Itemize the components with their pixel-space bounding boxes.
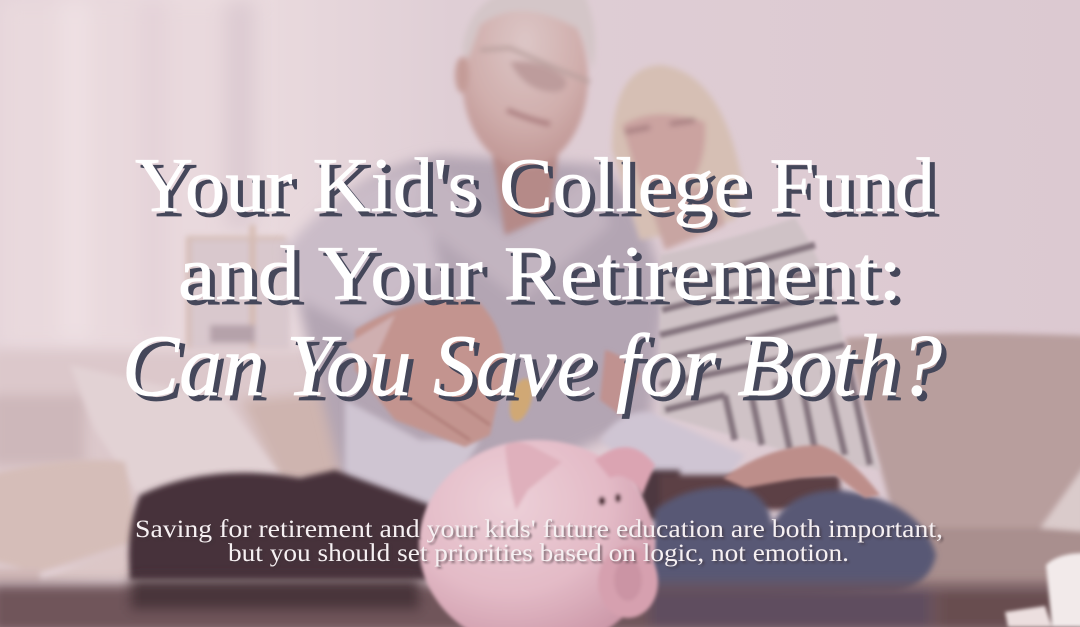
right sofa (845, 333, 1080, 590)
left seat cushion (0, 460, 138, 582)
man's shirt (285, 155, 665, 510)
table (0, 578, 1080, 627)
subtitle: but you should set priorities based on logic, not emotion. (230, 542, 851, 569)
striped sweater (660, 218, 880, 470)
subtitle (135, 516, 945, 569)
woman's hand on knee (723, 445, 880, 498)
woman (612, 65, 742, 250)
right pillow (1040, 465, 1080, 532)
piggy bank (419, 440, 658, 627)
subtitle: but you should set priorities based on logic, not emotion. (228, 540, 849, 567)
curtain at left (0, 0, 255, 350)
subtitle: Saving for retirement and your kids' future education are both important, (135, 516, 943, 543)
title line 3 italic: Can You Save for Both? (127, 323, 947, 420)
title (122, 142, 947, 420)
shelf (186, 225, 290, 350)
title line 3 italic: Can You Save for Both? (122, 318, 942, 415)
title line 2: and Your Retirement: (183, 235, 907, 321)
dark trousers (129, 470, 430, 580)
jeans (650, 487, 936, 605)
title line 1: Your Kid's College Fund (135, 142, 935, 228)
man's hand dropping coin (345, 300, 640, 447)
left pillow (70, 365, 280, 505)
title line 2: and Your Retirement: (178, 230, 902, 316)
man's head (455, 0, 595, 235)
dark area between legs (640, 470, 840, 520)
cup (1005, 553, 1080, 627)
man's lower shirt and sleeve (345, 400, 745, 512)
title line 1: Your Kid's College Fund (140, 147, 940, 233)
subtitle: Saving for retirement and your kids' future education are both important, (137, 518, 945, 545)
left sofa (0, 350, 350, 570)
